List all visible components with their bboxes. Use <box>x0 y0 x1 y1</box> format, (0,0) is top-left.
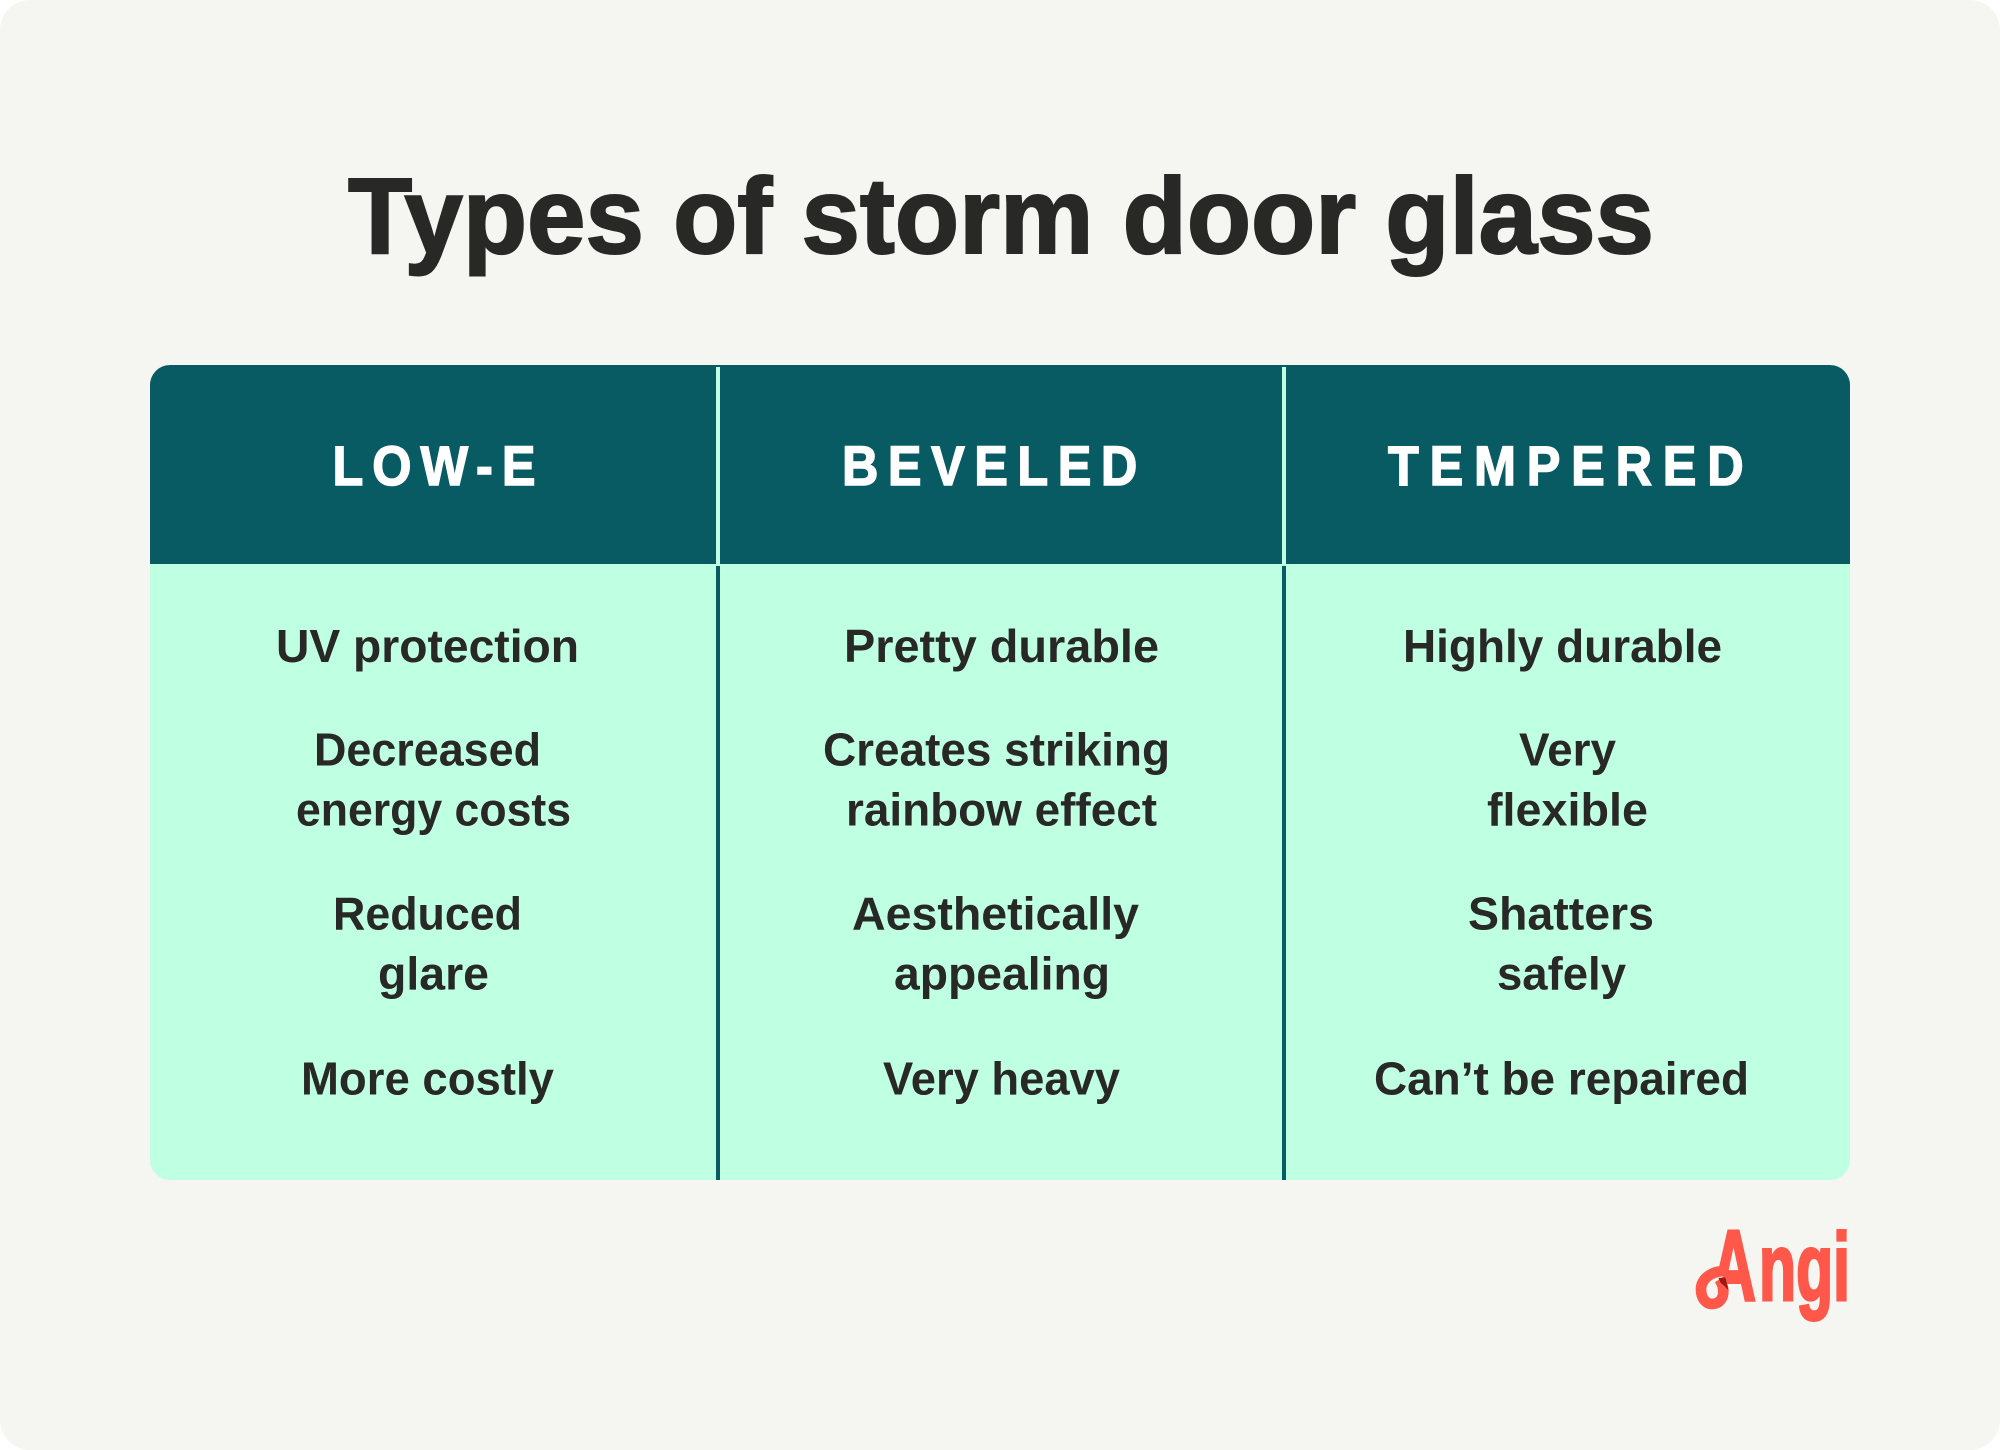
comparison table <box>150 365 1850 1180</box>
column: Low-E <box>276 436 579 1104</box>
heading: Tempered: TEMPERED <box>1388 436 1754 498</box>
item: Very flexible: Very <box>1519 724 1616 776</box>
item: Very flexible <box>1487 724 1648 836</box>
item: More costly: More costly <box>301 1052 554 1104</box>
item: Shatters safely: safely <box>1497 948 1626 1000</box>
item: Highly durable: Highly durable <box>1403 620 1722 672</box>
heading: Low-E: LOW-E <box>332 436 544 498</box>
logo: Angi: A <box>1711 1210 1756 1322</box>
table body background <box>150 564 1850 1180</box>
item: Creates striking rainbow effect <box>823 724 1170 836</box>
item: Creates striking rainbow effect: Creates striking <box>823 724 1170 776</box>
item: Shatters safely: Shatters <box>1468 888 1654 940</box>
column: Beveled <box>823 436 1170 1104</box>
item: Reduced glare <box>333 888 522 1000</box>
logo: Angi: ngi <box>1759 1214 1850 1321</box>
item: Can't be repaired: Can’t be repaired <box>1374 1052 1749 1104</box>
item: Decreased energy costs <box>296 724 571 836</box>
item: Reduced glare: Reduced <box>333 888 522 940</box>
logo: Angi <box>1693 1210 1850 1322</box>
item: Aesthetically appealing: Aesthetically <box>852 888 1139 940</box>
item: Shatters safely <box>1468 888 1654 1000</box>
item: Aesthetically appealing <box>852 888 1139 1000</box>
item: Decreased energy costs: Decreased <box>314 724 541 776</box>
item: Creates striking rainbow effect: rainbow effect <box>846 784 1157 836</box>
item: Very heavy: Very heavy <box>883 1052 1120 1104</box>
heading: Beveled: BEVELED <box>842 436 1147 498</box>
item: Reduced glare: glare <box>378 948 489 1000</box>
item: Pretty durable: Pretty durable <box>844 620 1159 672</box>
item: UV protection: UV protection <box>276 620 579 672</box>
title: Types of storm door glass <box>348 155 1654 276</box>
item: Very flexible: flexible <box>1487 784 1648 836</box>
column: Tempered <box>1374 436 1754 1104</box>
item: Aesthetically appealing: appealing <box>894 948 1110 1000</box>
item: Decreased energy costs: energy costs <box>296 784 571 836</box>
table header background <box>150 365 1850 564</box>
